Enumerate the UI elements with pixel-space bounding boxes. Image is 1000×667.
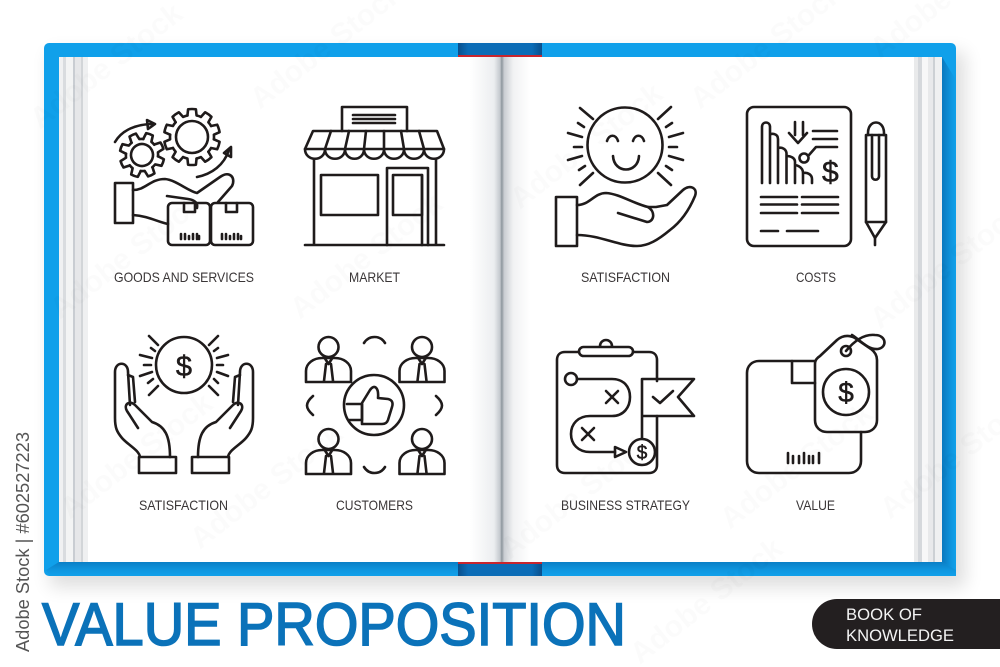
dollar sign: $ [838,377,854,408]
title: VALUE PROPOSITION [42,591,626,658]
label: BUSINESS STRATEGY [561,497,691,513]
label: GOODS AND SERVICES [114,269,254,285]
book shadow [50,52,965,587]
bottom ribbon [458,562,542,576]
badge: book of knowledge: BOOK OF [846,605,922,624]
panel: goods and services [113,109,254,285]
badge: book of knowledge [812,599,1000,649]
panel: value [747,335,884,513]
label: MARKET [349,269,400,285]
stock credit: Adobe Stock | #602527223 [13,432,33,652]
label: VALUE [796,497,835,513]
icon: four customers around a thumbs up [306,337,444,474]
icon: storefront [305,107,444,245]
icon: report with falling chart and pen [747,107,886,246]
icon: clipboard with route, flag and coin [557,340,694,473]
dollar sign: $ [637,443,648,464]
label: CUSTOMERS [336,497,413,513]
label: SATISFACTION [139,497,228,513]
book cover [44,43,956,576]
label: SATISFACTION [581,269,670,285]
pages [59,57,942,562]
badge: book of knowledge: KNOWLEDGE [846,626,954,645]
panel: satisfaction coin [115,336,253,513]
top ribbon [458,43,542,57]
panel: satisfaction smiley [556,107,696,285]
cover bottom inner shade [46,562,956,576]
dollar sign: $ [176,351,192,383]
icon: gears, hand and boxes [113,109,253,245]
book [44,43,965,587]
label: COSTS [796,269,836,285]
icon: smiling sun over hand [556,107,696,246]
panel: customers [306,337,444,513]
panel: market [305,107,444,285]
dollar sign: $ [822,156,839,189]
cover right inner shade [942,57,956,570]
icon: coin between two hands [115,336,253,473]
panel: business strategy [557,340,694,513]
icon: box with price tag [747,335,884,473]
panel: costs [747,107,886,285]
